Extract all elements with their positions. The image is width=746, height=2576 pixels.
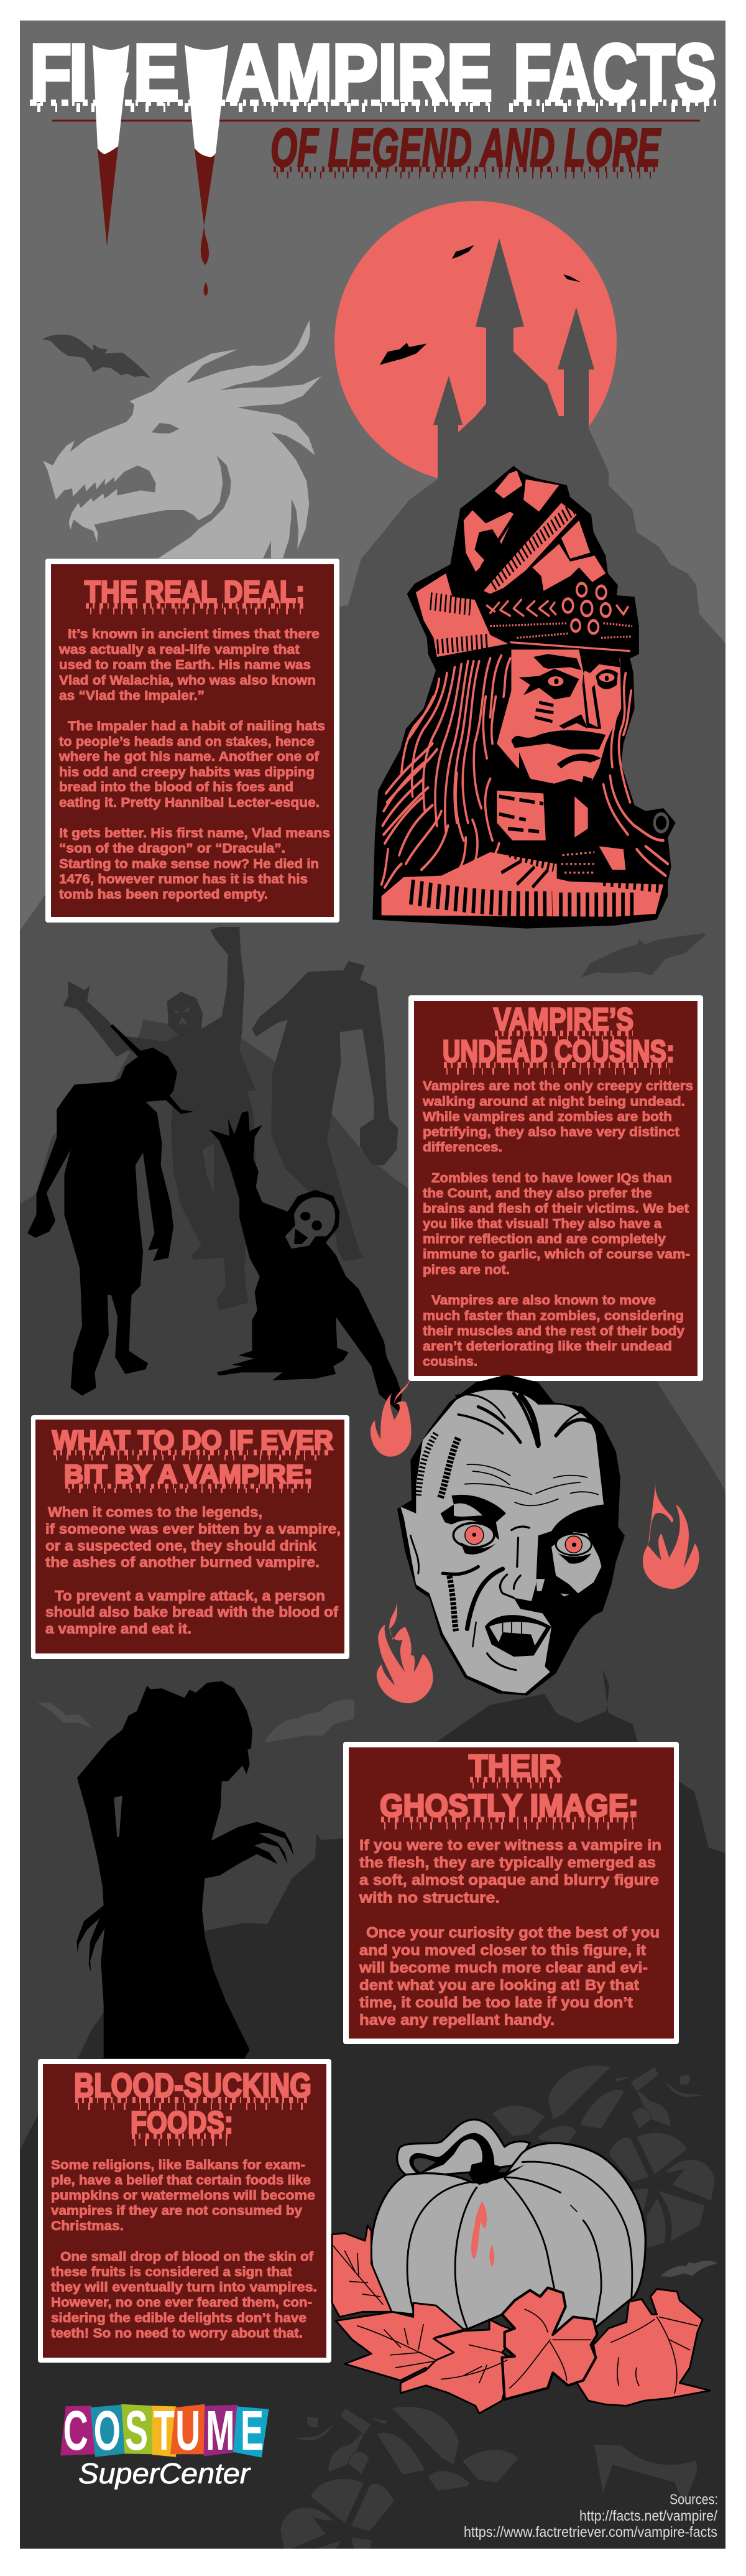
heading: WHAT TO DO IF EVER [52, 1425, 333, 1456]
nose fang highlight [536, 1579, 545, 1591]
nosferatu silhouette [37, 1681, 354, 2058]
sources [464, 2491, 718, 2540]
wordmark: COSTUME [63, 2399, 264, 2462]
body text: Christmas. [51, 2219, 124, 2233]
body text: 1476, however rumor has it is that his [59, 872, 308, 886]
face silhouette [397, 1375, 625, 1696]
body text [51, 2158, 317, 2340]
body text: Some religions, like Balkans for exam- [51, 2158, 305, 2172]
pumpkin crown [472, 2165, 525, 2185]
body text [359, 1837, 661, 2029]
body text: However, no one ever feared them, con- [51, 2295, 312, 2310]
heading: BLOOD-SUCKING [74, 2066, 311, 2104]
body text: they will eventually turn into vampires. [51, 2281, 317, 2295]
face skin [400, 1390, 604, 1693]
ghost pumpkin lower [280, 2407, 518, 2549]
panel: their ghostly image [343, 1742, 679, 2044]
portrait of Vlad the Impaler [372, 466, 676, 929]
body text: to people’s heads and on stakes, hence [59, 735, 315, 749]
body text: was actually a real-life vampire that [58, 643, 300, 657]
pumpkin body [371, 2143, 645, 2337]
body text: Vampires are also known to move [431, 1293, 656, 1308]
body text: as “Vlad the Impaler.” [59, 689, 205, 703]
heading: FOODS: [131, 2105, 233, 2140]
heading [380, 1749, 638, 1826]
body text: The Impaler had a habit of nailing hats [68, 719, 325, 733]
body text: If you were to ever witness a vampire in [359, 1837, 661, 1854]
body text: will become much more clear and evi- [359, 1960, 648, 1976]
body text: Vampires are not the only creepy critters [423, 1079, 693, 1094]
body text: petrifying, they also have very distinct [423, 1125, 679, 1140]
hair strands [382, 656, 668, 888]
body text: To prevent a vampire attack, a person [55, 1588, 325, 1604]
panel: what to do if ever bit by a vampire [31, 1415, 349, 1659]
heading [52, 1425, 333, 1490]
heading: GHOSTLY IMAGE: [380, 1788, 638, 1823]
leaf veins [333, 2246, 698, 2393]
body text: should also bake bread with the blood of [45, 1604, 338, 1620]
body text: immune to garlic, which of course vam- [423, 1247, 690, 1262]
bat top left [42, 335, 151, 378]
mouth [485, 1615, 551, 1657]
body text: with no structure. [359, 1890, 500, 1906]
body text: It gets better. His first name, Vlad means [59, 826, 330, 840]
fang left [93, 45, 129, 246]
body text: these fruits is considered a sign that [51, 2265, 292, 2279]
heading [443, 1002, 675, 1071]
front zombie left [27, 1025, 194, 1396]
body text: pires are not. [423, 1263, 510, 1277]
body text: sidering the edible delights don’t have [51, 2311, 306, 2325]
body text [422, 1079, 693, 1369]
body text: Once your curiosity got the best of you [366, 1925, 660, 1941]
heading [74, 2066, 311, 2142]
dragon [43, 320, 321, 558]
sources: http://facts.net/vampire/ [579, 2508, 718, 2524]
body text: “son of the dragon” or “Dracula”. [59, 842, 285, 856]
body text: vampires if they are not consumed by [51, 2204, 302, 2218]
body text: dent what you are looking at! By that [359, 1977, 639, 1994]
fang right with blood drop [185, 45, 228, 296]
body text: you like that visual! They also have a [423, 1217, 661, 1231]
body text: where he got his name. Another one of [58, 750, 320, 764]
title rule [52, 119, 700, 122]
body text: Vlad of Walachia, who was also known [59, 673, 316, 688]
cheek [551, 1532, 601, 1593]
front zombie with skull [209, 1111, 402, 1412]
back zombie center [63, 927, 256, 1311]
nose and creases [410, 1527, 529, 1670]
title words: F [30, 29, 71, 118]
body text: a vampire and eat it. [45, 1620, 191, 1637]
body text: time, it could be too late if you don’t [359, 1994, 633, 2011]
body text: much faster than zombies, considering [423, 1309, 684, 1323]
body text: his odd and creepy habits was dipping [59, 765, 315, 779]
sources: https://www.factretriever.com/vampire-facts [464, 2524, 717, 2540]
body text: the Count, and they also prefer the [423, 1186, 652, 1201]
body text: One small drop of blood on the skin of [60, 2249, 314, 2264]
hat ornament [430, 509, 573, 647]
body text [45, 1504, 341, 1637]
panel: vampire's undead cousins [408, 995, 703, 1381]
title words: I [69, 29, 88, 118]
body text: Starting to make sense now? He died in [59, 857, 319, 872]
logo: costume supercenter [60, 2399, 269, 2490]
blood on pumpkin [471, 2202, 494, 2267]
leaves [332, 2226, 710, 2414]
body text: the ashes of another burned vampire. [45, 1554, 320, 1570]
vampire face [371, 1375, 699, 1703]
flame right [643, 1481, 699, 1589]
portrait silhouette [372, 466, 676, 929]
panel: the real deal [45, 559, 339, 923]
body text: When it comes to the legends, [48, 1504, 262, 1520]
title words [30, 28, 716, 118]
ghost fangs [594, 2445, 697, 2504]
left brow [441, 1495, 506, 1540]
forehead lines [465, 1464, 598, 1505]
body text: used to roam the Earth. His name was [59, 658, 311, 672]
body text: mirror reflection and are completely [423, 1232, 666, 1247]
body text: cousins. [423, 1354, 477, 1369]
heading: VAMPIRE’S [494, 1002, 633, 1037]
bat small lower right [661, 2261, 718, 2277]
body text: have any repellant handy. [359, 2012, 555, 2029]
body text: if someone was ever bitten by a vampire, [45, 1521, 341, 1537]
pumpkin with leaves [332, 2119, 710, 2414]
body text [58, 627, 330, 902]
ghost pumpkin upper [492, 2065, 715, 2248]
right eye [556, 1534, 591, 1555]
script wordmark: SuperCenter [78, 2457, 251, 2490]
back zombie right [252, 961, 398, 1261]
body text: a soft, almost opaque and blurry figure [359, 1872, 659, 1889]
body text: walking around at night being undead. [422, 1095, 685, 1109]
sources: Sources: [670, 2491, 718, 2508]
body text: bread into the blood of his foes and [59, 780, 293, 794]
bat upper right [581, 933, 706, 978]
body text: Zombies tend to have lower IQs than [431, 1171, 672, 1186]
pumpkin stem [397, 2119, 530, 2177]
darker hill layer [20, 1020, 725, 2150]
body text: eating it. Pretty Hannibal Lecter-esque. [59, 796, 320, 810]
panel: blood-sucking foods [38, 2059, 331, 2363]
face shadow [513, 1505, 618, 1673]
lace [548, 791, 570, 846]
face [497, 649, 621, 788]
body text: their muscles and the rest of their body [423, 1324, 684, 1338]
spiral curl [655, 814, 668, 832]
body text: ple, have a belief that certain foods like [51, 2174, 311, 2187]
heading: THE REAL DEAL: [85, 575, 305, 609]
heading: BIT BY A VAMPIRE: [64, 1459, 313, 1489]
title words: V [190, 67, 211, 108]
flame top left [371, 1378, 699, 1703]
pumpkin ribs [407, 2162, 632, 2330]
neck and collar [382, 791, 663, 917]
title [30, 28, 716, 296]
title drips [30, 103, 716, 108]
title words: E [134, 29, 179, 118]
body text: aren’t deteriorating like their undead [423, 1339, 672, 1354]
title words: V [106, 67, 127, 108]
body text: It’s known in ancient times that there [68, 627, 320, 641]
body text: or a suspected one, they should drink [45, 1537, 316, 1553]
darkest hill layer [20, 1669, 725, 2549]
left eye [453, 1523, 494, 1547]
castle and hill silhouette [20, 238, 725, 1490]
heading: UNDEAD COUSINS: [443, 1034, 675, 1069]
body text: While vampires and zombies are both [423, 1110, 672, 1124]
body text: teeth! So no need to worry about that. [51, 2326, 303, 2340]
body text: and you moved closer to this figure, it [359, 1942, 646, 1959]
body text: differences. [423, 1140, 502, 1155]
face features [511, 653, 620, 791]
heading: THEIR [469, 1749, 561, 1783]
body text: brains and flesh of their victims. We bet [423, 1202, 689, 1216]
moon [334, 201, 617, 483]
hat patches [416, 470, 606, 657]
body text: pumpkins or watermelons will become [51, 2188, 315, 2203]
slicked hair [456, 1393, 591, 1447]
flame bottom left [377, 1597, 433, 1703]
body text: the flesh, they are typically emerged as [359, 1854, 656, 1871]
colour blocks [60, 2404, 269, 2458]
title words: AMPIRE [226, 28, 492, 118]
body text: tomb has been reported empty. [59, 888, 268, 902]
moon bats [380, 245, 581, 365]
